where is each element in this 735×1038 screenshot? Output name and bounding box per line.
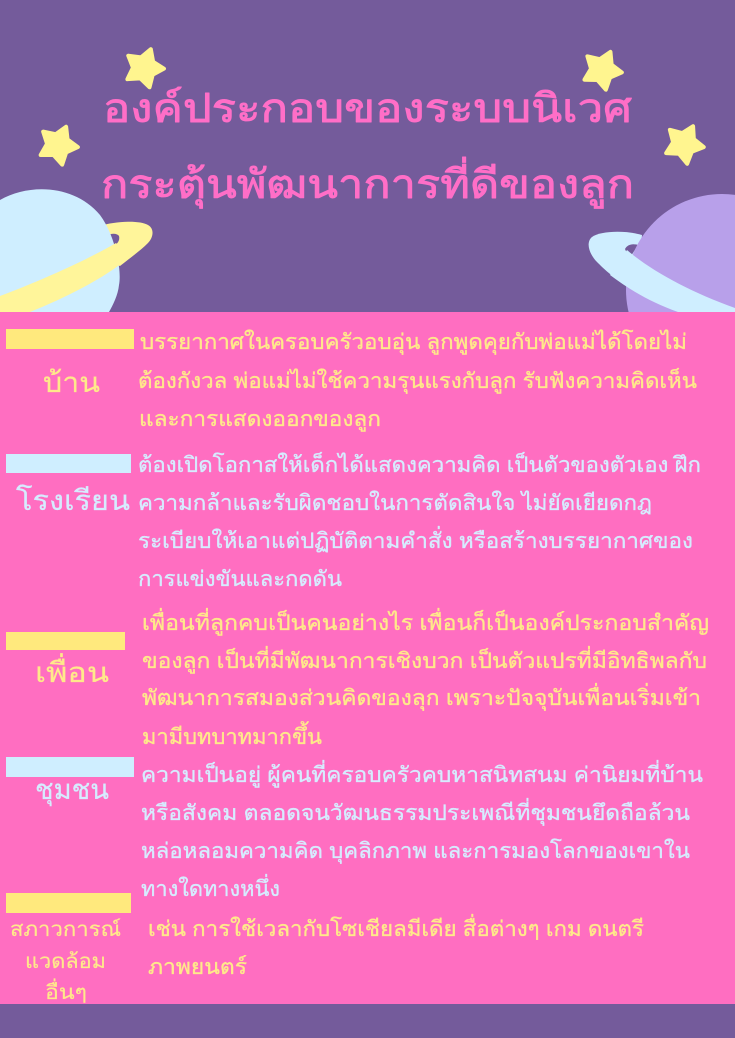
icon: right planet <box>589 194 735 386</box>
label: home: บ้าน <box>43 367 100 398</box>
label: other <box>10 918 121 1004</box>
text block: community: หล่อหลอมความคิด บุคลิกภาพ และการมองโลกของเขาใน <box>141 838 690 864</box>
icon: star 3 <box>578 44 628 93</box>
panel: community <box>6 757 703 901</box>
label: other: แวดล้อม <box>25 951 106 973</box>
text block: friends <box>142 608 709 749</box>
panel: home <box>6 329 697 432</box>
label bar: home <box>6 329 134 349</box>
text block: community: ทางใดทางหนึ่ง <box>141 874 280 901</box>
text block: home: และการแสดงออกของลูก <box>139 407 381 432</box>
icon: star 2 <box>34 119 83 168</box>
label: other: อื่นๆ <box>45 978 87 1004</box>
title <box>101 86 634 209</box>
label bar: friends <box>6 632 125 650</box>
label bar: school <box>6 454 131 473</box>
text block: school: ความกล้าและรับผิดชอบในการตัดสินใจ ไม่ยัดเยียดกฎ <box>138 490 652 515</box>
panel: friends <box>6 608 709 749</box>
text block: other: เช่น การใช้เวลากับโซเชียลมีเดีย สื่อต่างๆ เกม ดนตรี <box>148 914 644 941</box>
text block: home: ต้องกังวล พ่อแม่ไม่ใช้ความรุนแรงกับลูก รับฟังความคิดเห็น <box>138 366 697 394</box>
panel: content background <box>0 312 735 1004</box>
text block: other <box>148 914 644 979</box>
text block: school: ต้องเปิดโอกาสให้เด็กได้แสดงความคิด เป็นตัวของตัวเอง ฝึก <box>138 450 701 477</box>
text block: community <box>141 760 703 901</box>
label: friends: เพื่อน <box>35 653 109 688</box>
text block: other: ภาพยนตร์ <box>148 955 247 979</box>
icon: star 1 <box>121 43 169 90</box>
text block: home: บรรยากาศในครอบครัวอบอุ่น ลูกพูดคุยกับพ่อแม่ได้โดยไม่ <box>140 329 687 355</box>
text block: friends: ของลูก เป็นที่มีพัฒนาการเชิงบวก เป็นตัวแปรที่มีอิทธิพลกับ <box>142 646 707 674</box>
text block: school: การแข่งขันและกดดัน <box>138 567 342 591</box>
label: school: โรงเรียน <box>16 484 130 516</box>
panel: school <box>6 450 701 591</box>
text block: school <box>138 450 701 591</box>
title: องค์ประกอบของระบบนิเวศ <box>103 86 632 131</box>
text block: school: ระเบียบให้เอาแต่ปฏิบัติตามคำสั่ง หรือสร้างบรรยากาศของ <box>138 526 693 553</box>
icon: left planet <box>0 189 153 312</box>
label: other: สภาวการณ์ <box>10 918 121 941</box>
label bar: other <box>6 893 131 913</box>
text block: community: หรือสังคม ตลอดจนวัฒนธรรมประเพณีที่ชุมชนยึดถือล้วน <box>141 798 690 826</box>
text block: friends: เพื่อนที่ลูกคบเป็นคนอย่างไร เพื่อนก็เป็นองค์ประกอบสำคัญ <box>142 608 709 636</box>
text block: friends: มามีบทบาทมากขึ้น <box>142 721 322 749</box>
text block: community: ความเป็นอยู่ ผู้คนที่ครอบครัวคบหาสนิทสนม ค่านิยมที่บ้าน <box>141 760 703 788</box>
icon: star 4 <box>660 118 710 167</box>
panel: other environment <box>6 893 644 1004</box>
text block: friends: พัฒนาการสมองส่วนคิดของลุก เพราะปัจจุบันเพื่อนเริ่มเข้า <box>142 683 701 711</box>
text block: home <box>138 329 697 432</box>
label: community: ชุมชน <box>35 774 109 807</box>
label bar: community <box>6 757 134 777</box>
title: กระตุ้นพัฒนาการที่ดีของลูก <box>101 157 634 209</box>
